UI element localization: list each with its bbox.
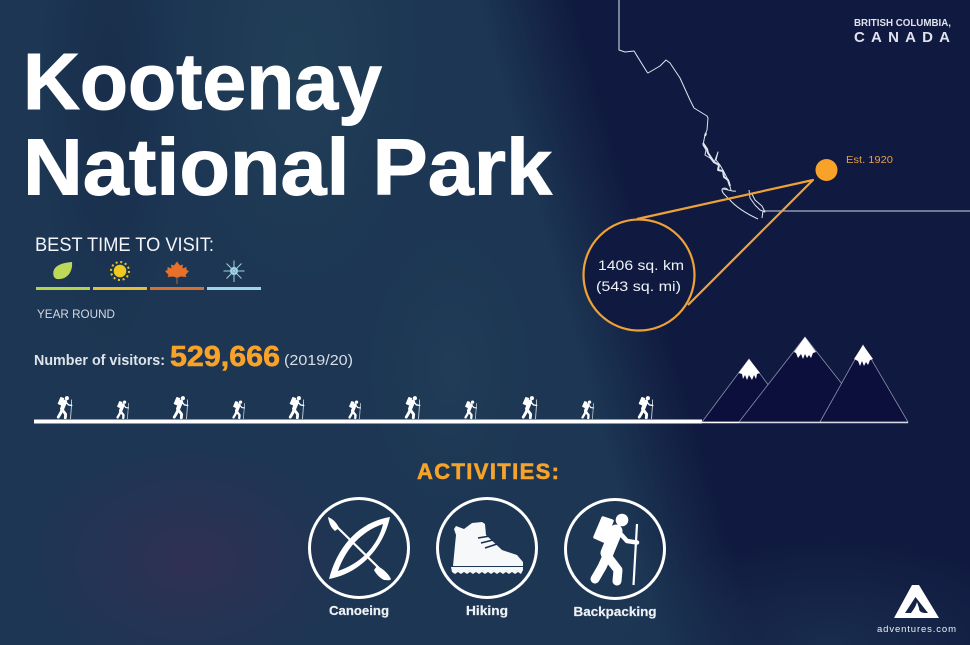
activity: hiking: Hiking (466, 603, 508, 618)
title: National Park (23, 122, 553, 212)
season bars (36, 287, 261, 290)
icon: leaf (53, 262, 72, 279)
visitors: 529,666 (170, 341, 280, 373)
activity: canoeing: Canoeing (329, 603, 389, 618)
region label (854, 18, 951, 46)
visitors: (2019/20) (284, 353, 353, 369)
title (23, 37, 553, 212)
title: Kootenay (23, 37, 382, 126)
area callout: 1406 sq. km (598, 257, 684, 273)
icon: snowflake (224, 260, 244, 282)
activity: canoeing (310, 498, 408, 618)
icon: boot (451, 522, 523, 574)
seasons (36, 260, 261, 290)
icon: maple leaf (165, 262, 189, 284)
park location marker (816, 159, 838, 181)
area callout (584, 180, 813, 330)
activity: backpacking: Backpacking (574, 604, 657, 619)
hikers on trail (34, 396, 702, 424)
mountains (702, 337, 908, 422)
icon: backpacker (595, 514, 637, 585)
region label: BRITISH COLUMBIA, (854, 18, 951, 29)
best time heading: BEST TIME TO VISIT: (35, 234, 214, 256)
year round label: YEAR ROUND (37, 309, 115, 321)
visitors: Number of visitors: (34, 353, 165, 369)
logo: adventures.com: adventures.com (877, 624, 956, 635)
map: British Columbia outline (619, 0, 970, 219)
activity: backpacking (566, 500, 664, 619)
established label: Est. 1920 (846, 154, 893, 166)
activity: hiking (438, 498, 536, 618)
icon: sun (111, 262, 129, 280)
activities heading: ACTIVITIES: (417, 459, 559, 484)
logo: adventures.com (877, 585, 956, 635)
visitors (34, 341, 353, 373)
region label: CANADA (854, 29, 950, 46)
area callout: (543 sq. mi) (596, 278, 681, 294)
icon: kayak and paddle (328, 517, 391, 580)
